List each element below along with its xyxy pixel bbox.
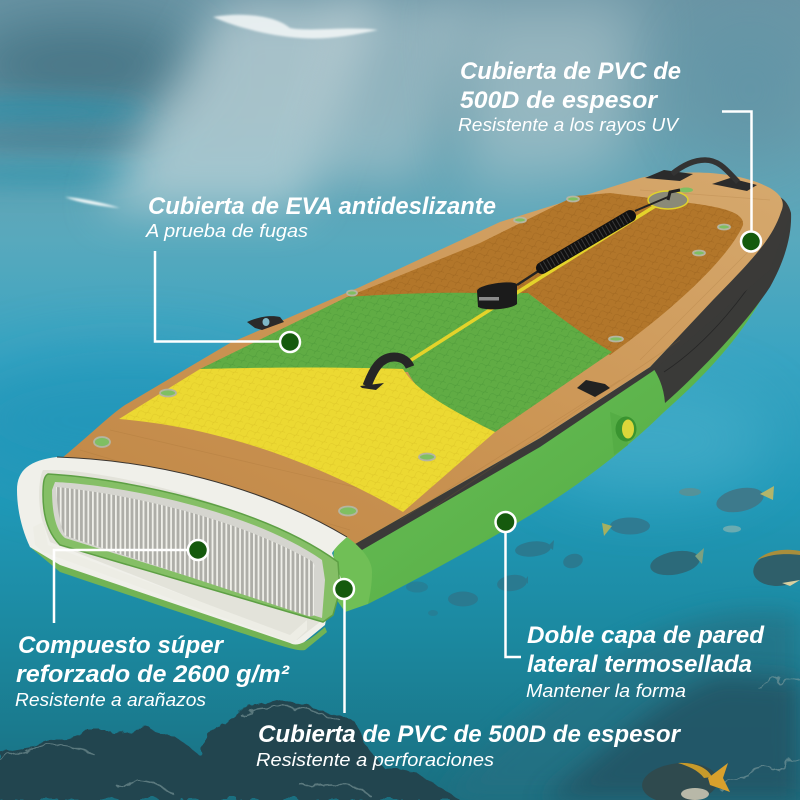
grommets [94,188,730,516]
deck pad green [200,293,612,432]
callout: doble capa [496,512,765,701]
deck wood [62,173,783,544]
sub text: Resistente a arañazos [15,689,206,710]
paddle board [17,160,791,650]
heading second line: 500D de espesor [460,87,658,114]
fish 1 [714,484,774,516]
inflation valve [610,412,636,455]
sub text: Resistente a los rayos UV [458,114,680,135]
black seam [355,205,791,550]
grille core frame [52,482,325,618]
rear carry handle [645,160,757,191]
fish 2 [602,518,650,536]
heading: Compuesto súper [18,632,224,659]
small fish group [406,488,741,616]
leash anchor [648,190,688,209]
grille core [56,487,315,616]
deck pad brown [347,193,743,355]
callout: cubierta PVC UV [458,58,761,252]
heading: Cubierta de EVA antideslizante [148,193,496,220]
background fish [406,484,800,800]
leader line [722,112,752,235]
callout: cubierta PVC perforaciones [256,579,681,770]
wood grain [80,190,770,530]
marker [188,540,208,560]
green inner layer [43,474,340,622]
marker [334,579,354,599]
leader line [506,527,521,657]
leader line [343,595,346,713]
ankle cuff [477,282,517,309]
heading: Doble capa de pared [527,622,765,649]
callout: cubierta EVA [145,193,496,352]
fish bottom [640,760,730,800]
white shell [17,457,347,648]
coral reef [0,612,800,800]
end cap green [330,537,372,612]
cross-section [17,457,347,650]
leader line [155,251,284,342]
marker [280,332,300,352]
side clip right [577,380,610,397]
sub text: Resistente a perforaciones [256,749,494,770]
side clip left [247,316,284,330]
heading second line: reforzado de 2600 g/m² [16,661,290,688]
center line [408,203,660,362]
green bottom layer [30,547,327,650]
callout: compuesto súper reforzado [15,540,290,710]
heading: Cubierta de PVC de 500D de espesor [258,721,681,748]
heading: Cubierta de PVC de [460,58,681,85]
center handle [360,357,410,390]
black side panel [653,197,791,403]
marker [496,512,516,532]
heading second line: lateral termosellada [527,651,752,678]
sub text: A prueba de fugas [145,220,308,241]
marker [741,232,761,252]
fish 4 [750,546,800,590]
leader line [54,550,192,623]
fish 3 [648,547,704,579]
deck pad yellow [119,368,495,512]
white bottom layer [33,522,307,643]
sub text: Mantener la forma [526,680,686,701]
side wall green [345,298,762,604]
coiled leash [517,197,668,285]
